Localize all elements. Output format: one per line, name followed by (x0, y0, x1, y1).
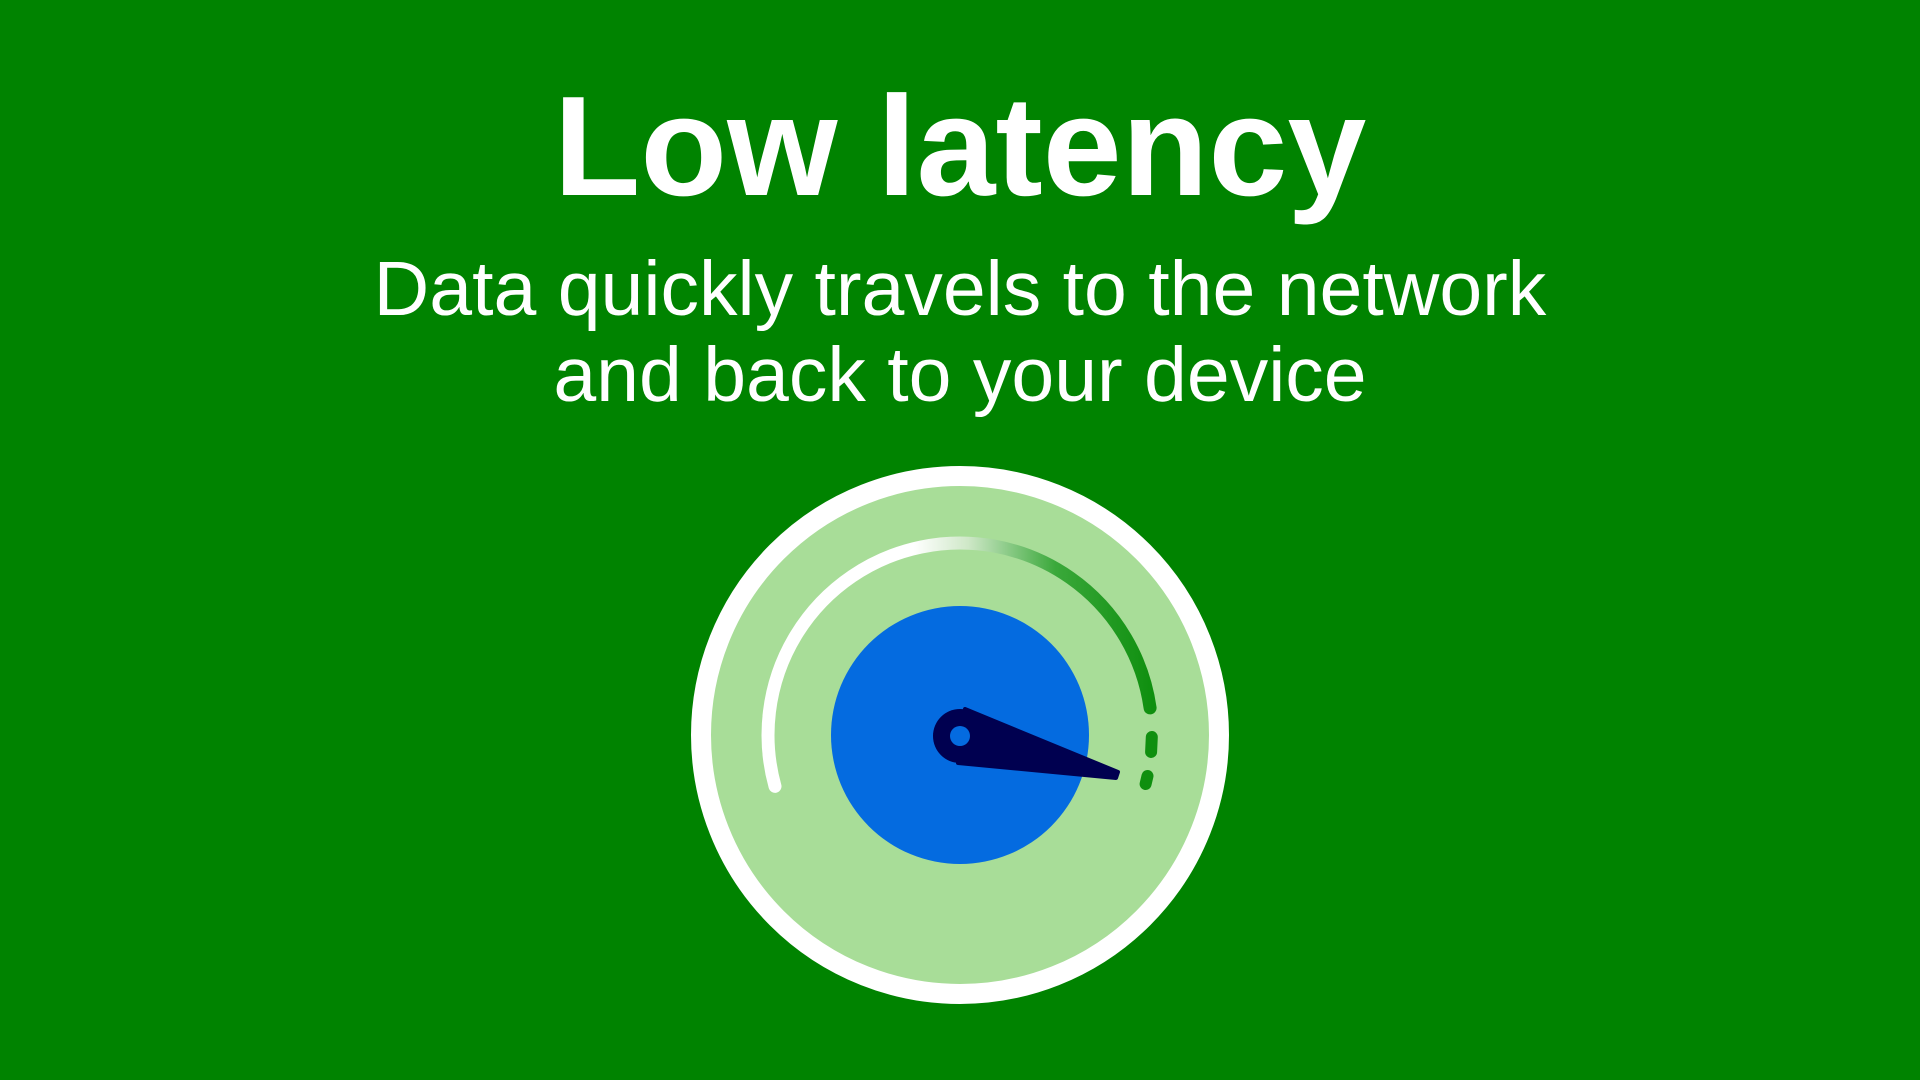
title: Low latency (554, 67, 1366, 226)
subtitle: and back to your device (553, 332, 1367, 418)
needle (933, 709, 1118, 778)
subtitle: Data quickly travels to the network (374, 246, 1546, 332)
subtitle (374, 246, 1546, 418)
